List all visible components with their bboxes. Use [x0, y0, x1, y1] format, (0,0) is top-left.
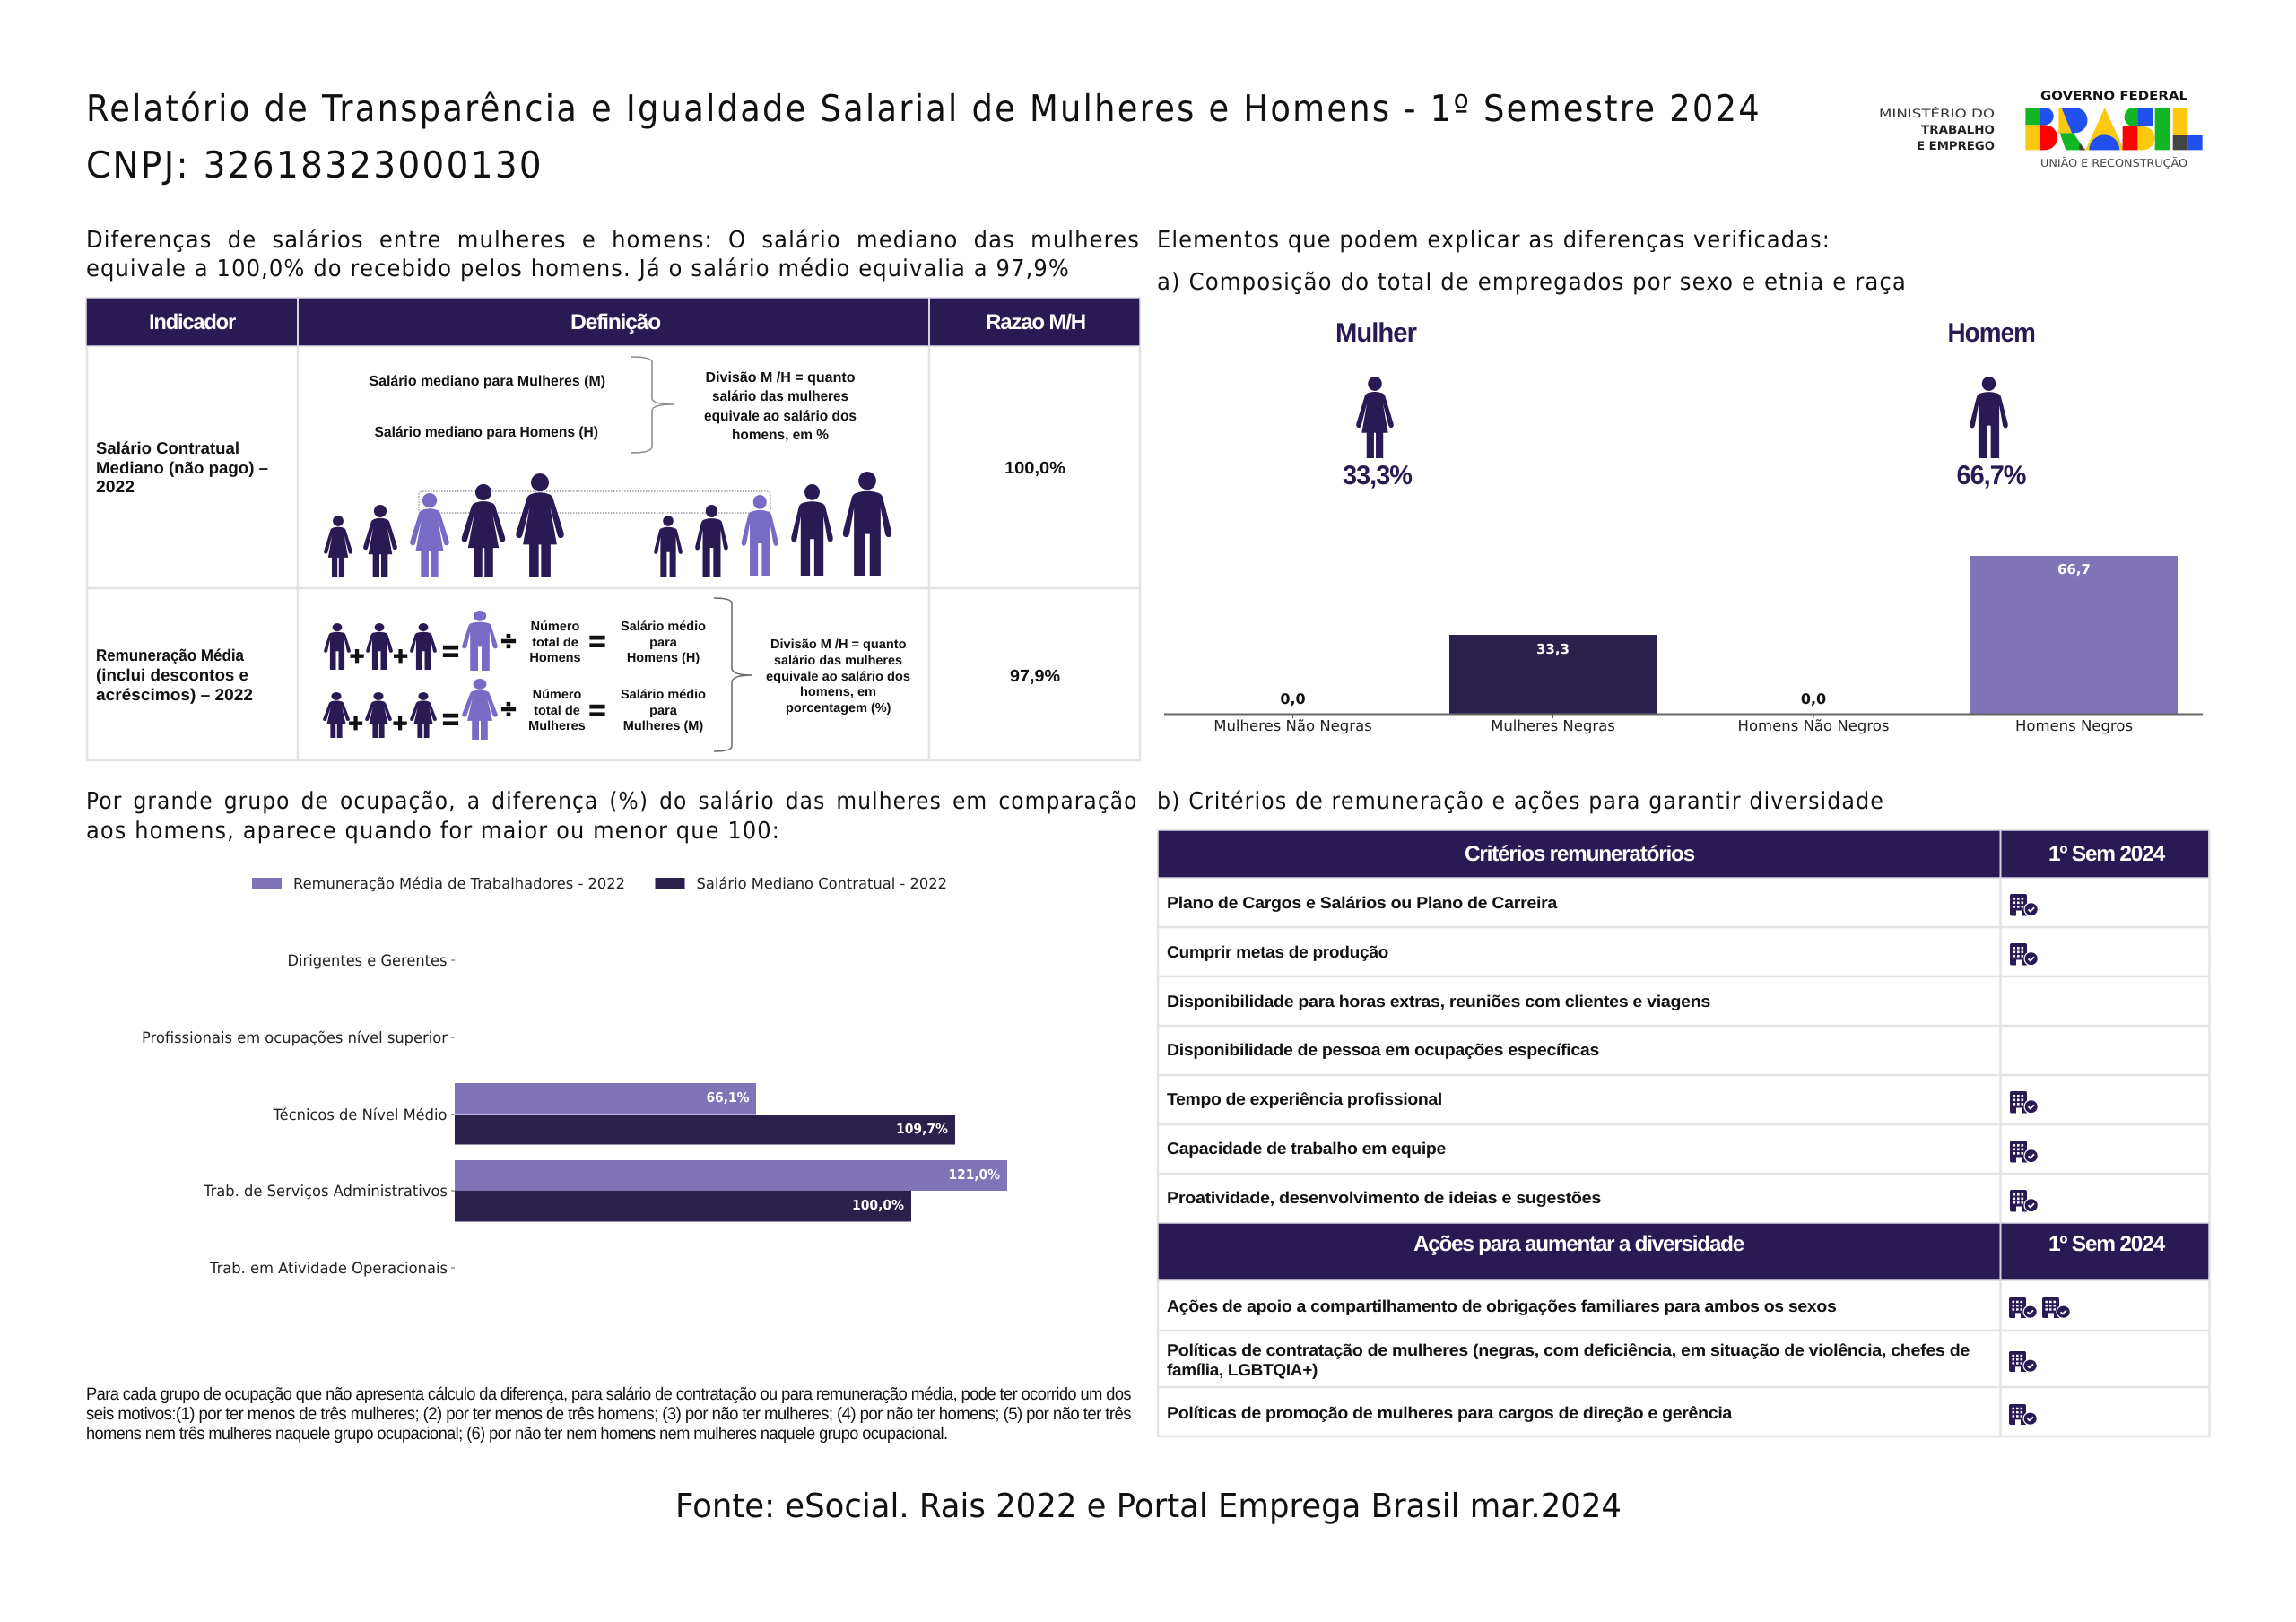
bars: Trab. de Serviços Administrativos: [455, 1160, 1007, 1221]
bar chart: employees by sex and race: Mulheres Negras: [1491, 717, 1615, 734]
table header: Definição: [570, 310, 661, 334]
average formula: men: para: [649, 636, 678, 650]
Mulher stat: Mulher: [1335, 318, 1417, 348]
panel: sex totals: [1335, 318, 2035, 490]
bar chart: employees by sex and race: 33,3: [1536, 641, 1570, 657]
text: salary differences summary: Diferenças de salários entre mulheres e homens: O salário mediano das mulheres: [86, 227, 1140, 254]
median formula text: [370, 374, 605, 440]
bars: Trab. de Serviços Administrativos: 121,0%: [949, 1167, 1000, 1183]
criteria rows: Disponibilidade para horas extras, reuniões com clientes e viagens: [1167, 992, 1710, 1010]
average formula: women: para: [649, 704, 678, 718]
average formula: women: total de: [534, 704, 580, 718]
average formula: women: Número: [533, 688, 582, 702]
criteria header: 1º Sem 2024: [2048, 842, 2166, 866]
source line: Fonte: eSocial. Rais 2022 e Portal Emprega Brasil mar.2024: [675, 1487, 1622, 1525]
footnote: seis motivos:(1) por ter menos de três mulheres; (2) por ter menos de três homens; (3) por não ter mulheres; (4) por não ter homens; (5) por não ter três: [86, 1404, 1132, 1424]
actions header: Ações para aumentar a diversidade: [1413, 1232, 1744, 1256]
row label: Salário Contratual Mediano: [96, 438, 268, 496]
text: salary differences summary: [86, 227, 1140, 282]
row label: Salário Contratual Mediano: 2022: [96, 477, 135, 496]
average division explanation: homens, em: [800, 685, 876, 699]
median division explanation: equivale ao salário dos: [704, 409, 857, 424]
Mulher stat: [1335, 318, 1417, 490]
average formula: men: total de: [532, 636, 578, 650]
row label: Salário Contratual Mediano: Salário Contratual: [96, 438, 239, 457]
brace: [631, 357, 674, 453]
median division explanation: Divisão M /H = quanto: [705, 370, 856, 386]
actions rows: Políticas de promoção de mulheres para cargos de direção e gerência: [1167, 1403, 1733, 1422]
legend: [252, 875, 947, 892]
criteria rows: [1167, 893, 1710, 1207]
row label: Remuneração Média: (inclui descontos e: [96, 665, 248, 684]
average division explanation: equivale ao salário dos: [766, 670, 910, 684]
heading a: a) Composição do total de empregados por sexo e etnia e raça: [1157, 269, 1907, 296]
Homem stat: 66,7%: [1957, 461, 2026, 490]
actions header: [1158, 1223, 2209, 1280]
logo: Ministério do Trabalho e Emprego / Governo Federal: MINISTÉRIO DO: [1879, 106, 1995, 121]
value: median ratio: 100,0%: [1004, 459, 1065, 478]
text: explanatory elements heading: Elementos que podem explicar as diferenças verificadas:: [1157, 227, 1831, 254]
panel: diversity actions table: [1158, 1223, 2209, 1426]
bar chart: employees by sex and race: 0,0: [1280, 690, 1306, 707]
text: salary differences summary: equivale a 100,0% do recebido pelos homens. Já o salário médio equivalia a 97,9%: [86, 256, 1070, 282]
average formula: women: ÷: [501, 695, 516, 724]
bar chart: employees by sex and race: Homens Negros: [2015, 717, 2133, 734]
logo: Ministério do Trabalho e Emprego / Governo Federal: [1879, 90, 2203, 169]
criteria rows: Plano de Cargos e Salários ou Plano de Carreira: [1167, 893, 1558, 912]
row label: Salário Contratual Mediano: Mediano (não pago) –: [96, 458, 268, 477]
average formula: women: =: [589, 694, 605, 726]
bar chart: employees by sex and race: Mulheres Não Negras: [1213, 717, 1372, 734]
average division explanation: porcentagem (%): [786, 701, 891, 716]
bar chart: occupation groups: [142, 875, 1007, 1278]
criteria rows: Disponibilidade de pessoa em ocupações específicas: [1167, 1040, 1599, 1059]
median people pictogram: [324, 472, 891, 577]
average formula: women: =: [442, 703, 459, 735]
average formula: men: Homens (H): [627, 651, 700, 665]
title: Relatório de Transparência e Igualdade Salarial de Mulheres e Homens - 1º Semestre 2024: [86, 87, 1761, 130]
category labels: Trab. de Serviços Administrativos: [203, 1183, 448, 1201]
average formula: women: +: [393, 709, 407, 737]
criteria rows: Capacidade de trabalho em equipe: [1167, 1139, 1446, 1158]
value: average ratio: 97,9%: [1010, 667, 1060, 686]
average formula: men: =: [442, 635, 459, 667]
Mulher stat: 33,3%: [1343, 461, 1412, 490]
text: occupational group intro: aos homens, aparece quando for maior ou menor que 100:: [86, 818, 780, 845]
median division explanation: [704, 370, 857, 443]
bar chart: employees by sex and race: 66,7: [2057, 561, 2091, 577]
title: CNPJ: 32618323000130: [86, 143, 544, 186]
text: occupational group intro: Por grande grupo de ocupação, a diferença (%) do salário das mulheres em comparação: [86, 788, 1137, 815]
icons: criteria adopted: [2010, 894, 2039, 1212]
average division explanation: salário das mulheres: [774, 654, 902, 668]
legend: Remuneração Média de Trabalhadores - 2022: [293, 875, 625, 892]
brace: [714, 598, 752, 751]
average formula: women: Mulheres: [528, 719, 586, 733]
logo: Ministério do Trabalho e Emprego / Governo Federal: UNIÃO E RECONSTRUÇÃO: [2040, 156, 2187, 169]
logo: Ministério do Trabalho e Emprego / Governo Federal: TRABALHO: [1921, 124, 1995, 137]
actions rows: família, LGBTQIA+): [1167, 1360, 1318, 1379]
average division explanation: Divisão M /H = quanto: [770, 638, 907, 652]
actions rows: Políticas de contratação de mulheres (negras, com deficiência, em situação de violência, chefes de: [1167, 1340, 1970, 1359]
average formula: women: [323, 679, 706, 740]
average division explanation: [766, 638, 910, 716]
bars: Técnicos de Nível Médio: 66,1%: [707, 1089, 750, 1106]
criteria rows: Cumprir metas de produção: [1167, 942, 1388, 961]
footnote: homens nem três mulheres naquele grupo ocupacional; (6) por não ter nem homens nem mulheres naquele grupo ocupacional.: [86, 1424, 947, 1444]
Homem stat: [1948, 318, 2035, 490]
actions header: 1º Sem 2024: [2048, 1232, 2166, 1256]
row label: Remuneração Média: acréscimos) – 2022: [96, 685, 253, 704]
average formula: men: ÷: [501, 627, 516, 656]
median division explanation: salário das mulheres: [712, 389, 848, 404]
criteria header: Critérios remuneratórios: [1465, 842, 1695, 866]
criteria rows: Proatividade, desenvolvimento de ideias e sugestões: [1167, 1188, 1601, 1207]
average formula: men: [324, 611, 706, 671]
bar chart: employees by sex and race: [1164, 556, 2203, 734]
category labels: Trab. em Atividade Operacionais: [209, 1260, 448, 1278]
average formula: men: +: [350, 642, 364, 670]
category labels: Profissionais em ocupações nível superior: [142, 1029, 448, 1047]
bars: Técnicos de Nível Médio: [455, 1083, 955, 1144]
criteria header: [1158, 830, 2209, 878]
median division explanation: homens, em %: [732, 428, 829, 443]
logo: Ministério do Trabalho e Emprego / Governo Federal: GOVERNO FEDERAL: [2040, 90, 2187, 103]
title: [86, 87, 1761, 186]
actions rows: [1167, 1297, 1970, 1422]
category labels: Técnicos de Nível Médio: [273, 1106, 447, 1124]
legend: Salário Mediano Contratual - 2022: [696, 875, 947, 892]
bars: Técnicos de Nível Médio: 109,7%: [896, 1121, 948, 1137]
average formula: women: Mulheres (M): [623, 719, 703, 733]
panel: indicator definitions table: [86, 298, 1141, 760]
category labels: [142, 952, 448, 1278]
table header: Razao M/H: [986, 310, 1085, 334]
criteria rows: Tempo de experiência profissional: [1167, 1089, 1442, 1108]
text: occupational group intro: [86, 788, 1137, 845]
bars: Trab. de Serviços Administrativos: 100,0%: [852, 1197, 904, 1213]
average formula: women: +: [348, 709, 363, 737]
logo: Ministério do Trabalho e Emprego / Governo Federal: E EMPREGO: [1917, 140, 1995, 153]
heading b: b) Critérios de remuneração e ações para garantir diversidade: [1157, 788, 1884, 815]
footnote: Para cada grupo de ocupação que não apresenta cálculo da diferença, para salário de contratação ou para remuneração média, pode ter ocorrido um dos: [86, 1384, 1132, 1404]
average formula: men: Homens: [529, 651, 581, 665]
panel: remuneration criteria table: [1157, 830, 2210, 1436]
average formula: men: Número: [531, 620, 580, 634]
average formula: men: Salário médio: [621, 620, 706, 634]
average formula: women: Salário médio: [621, 688, 706, 702]
median formula text: Salário mediano para Homens (H): [375, 425, 598, 440]
median formula text: Salário mediano para Mulheres (M): [370, 374, 605, 389]
row label: Remuneração Média: [96, 646, 253, 704]
icons: actions adopted: [2009, 1297, 2071, 1426]
category labels: Dirigentes e Gerentes: [287, 952, 448, 970]
Homem stat: Homem: [1948, 318, 2035, 348]
average formula: men: +: [393, 642, 408, 670]
footnote: [86, 1384, 1132, 1444]
bar chart: employees by sex and race: 0,0: [1801, 690, 1826, 707]
row label: Remuneração Média: Remuneração Média: [96, 646, 245, 664]
actions rows: Ações de apoio a compartilhamento de obrigações familiares para ambos os sexos: [1167, 1297, 1837, 1315]
average formula: men: =: [589, 625, 605, 657]
table header: Indicador: [149, 310, 236, 334]
table header: [86, 298, 1140, 346]
bar chart: employees by sex and race: Homens Não Negros: [1738, 717, 1889, 734]
